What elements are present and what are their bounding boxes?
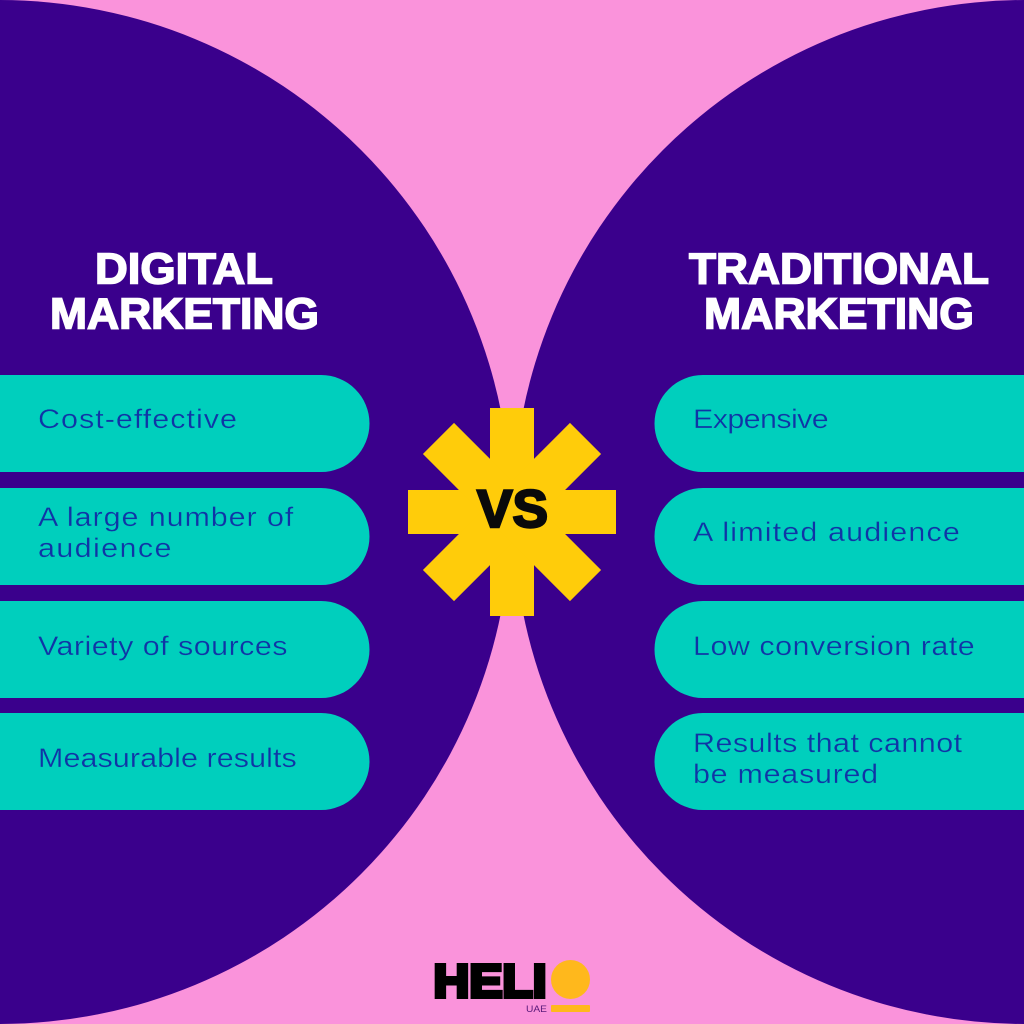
heading: traditional marketing: TRADITIONAL — [689, 244, 989, 294]
item: measurable results — [0, 713, 370, 810]
logo: helio uae: UAE — [526, 1004, 547, 1015]
item: a large number of audience — [0, 488, 370, 585]
item: variety of sources: Variety of sources — [38, 632, 288, 661]
item: expensive: Expensive — [693, 405, 829, 434]
item: measurable results: Measurable results — [38, 744, 297, 773]
logo: helio uae: HELI — [434, 955, 546, 1007]
item: a large number of audience: A large number of — [38, 503, 293, 532]
heading: traditional marketing: MARKETING — [704, 290, 974, 338]
item: low conversion rate — [654, 601, 1024, 698]
item: low conversion rate: Low conversion rate — [693, 632, 975, 661]
item: a limited audience — [654, 488, 1024, 585]
item: results that cannot be measured: be measured — [693, 760, 878, 789]
vs badge — [408, 408, 616, 616]
item: a large number of audience: audience — [38, 534, 171, 563]
panel: traditional marketing — [513, 0, 1024, 1024]
vs badge: VS — [477, 480, 548, 539]
item: expensive — [654, 375, 1024, 472]
heading: digital marketing: DIGITAL — [95, 244, 273, 294]
item: cost-effective: Cost-effective — [38, 405, 237, 434]
heading: digital marketing: MARKETING — [50, 290, 319, 338]
item: results that cannot be measured: Results that cannot — [693, 729, 962, 758]
item: results that cannot be measured — [654, 713, 1024, 810]
item: variety of sources — [0, 601, 370, 698]
panel: digital marketing — [0, 0, 511, 1024]
item: a limited audience: A limited audience — [693, 518, 960, 547]
logo: helio uae — [434, 955, 590, 1015]
heading: digital marketing — [50, 244, 319, 338]
heading: traditional marketing — [689, 244, 989, 338]
item: cost-effective — [0, 375, 370, 472]
